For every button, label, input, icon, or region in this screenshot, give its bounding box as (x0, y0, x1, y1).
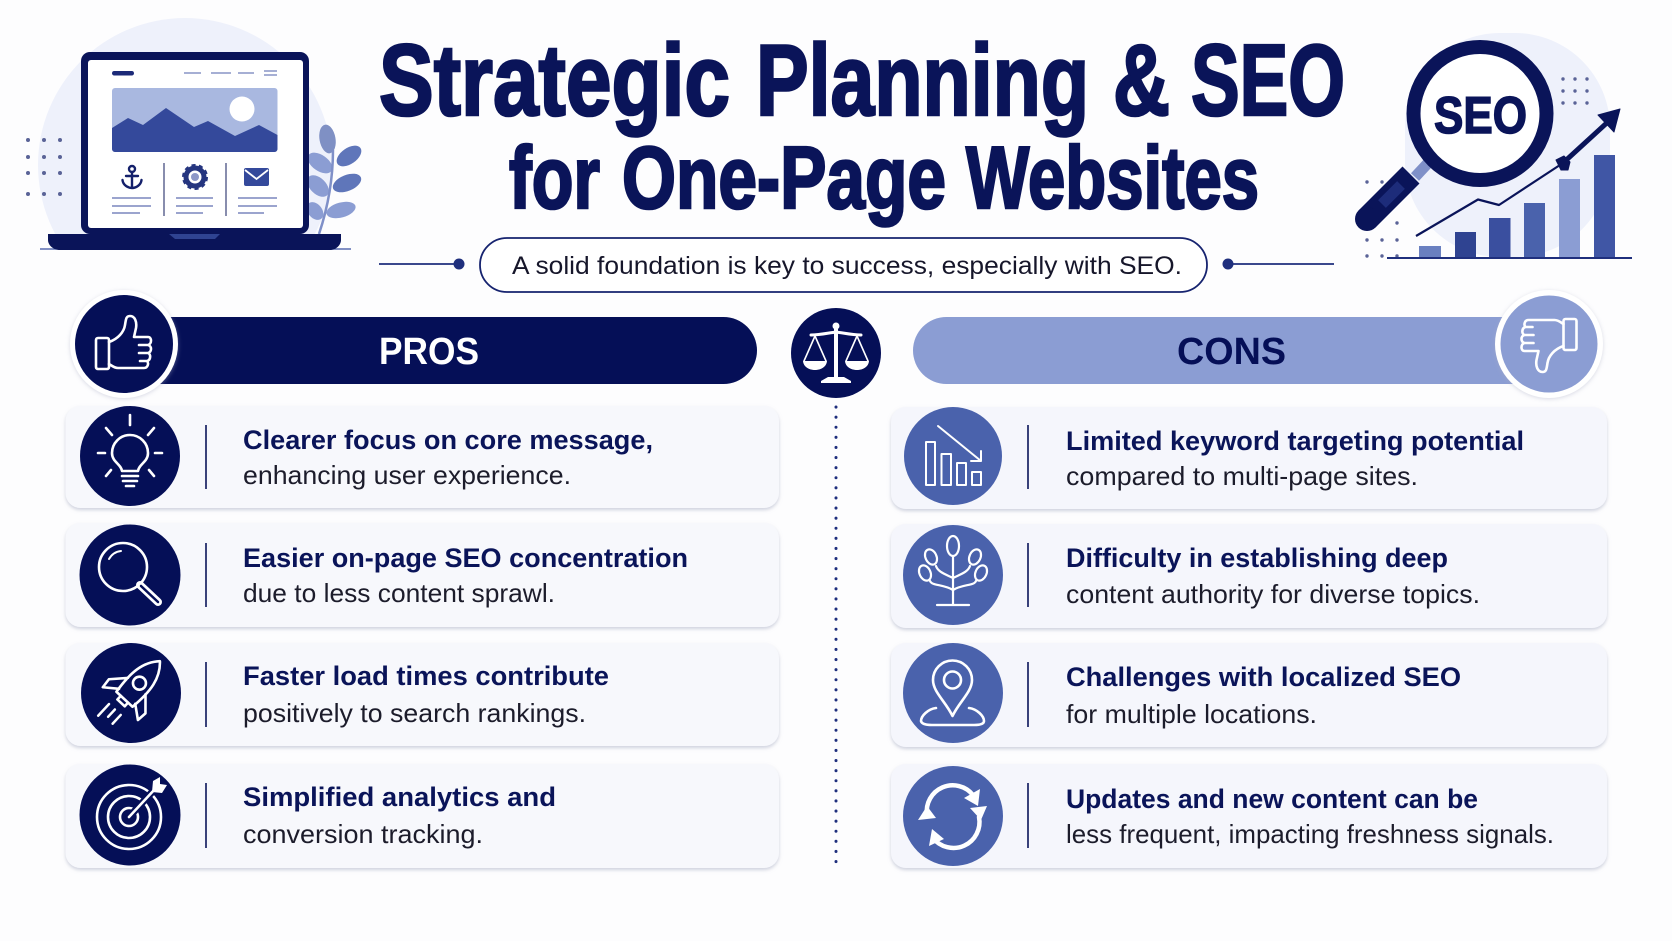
bar chart (1387, 155, 1632, 258)
dot grid (26, 138, 62, 196)
con card 3 (891, 643, 1607, 747)
icon: branching tree (903, 525, 1003, 625)
con card 1: compared to multi-page sites. (1066, 461, 1418, 491)
subtitle pill: A solid foundation is key to success, especially with SEO. (512, 252, 1182, 280)
pro card 2: due to less content sprawl. (243, 578, 555, 608)
pro card 2 (66, 523, 779, 627)
pro card 2: Easier on-page SEO concentration (243, 543, 688, 573)
hero image (112, 88, 278, 152)
title: Websites (966, 128, 1259, 227)
con card 4: less frequent, impacting freshness signals. (1066, 819, 1554, 849)
pro card 1 (66, 406, 779, 508)
con card 1: Limited keyword targeting potential (1066, 426, 1524, 456)
cons label: CONS (1177, 331, 1286, 373)
laptop base (40, 248, 351, 250)
con card 2: content authority for diverse topics. (1066, 579, 1480, 609)
gear icon (184, 166, 206, 188)
pros label: PROS (379, 331, 479, 373)
SEO growth illustration (1355, 33, 1632, 258)
subtitle pill (379, 238, 1334, 292)
magnifying glass: SEO (1434, 87, 1527, 145)
con card 3: Challenges with localized SEO (1066, 662, 1461, 692)
icon: declining bars (904, 407, 1002, 505)
title (379, 25, 1345, 227)
envelope icon (244, 168, 269, 186)
pro card 4: conversion tracking. (243, 819, 483, 849)
pro card 4: Simplified analytics and (243, 782, 556, 812)
panel: pros header (70, 290, 757, 398)
pro card 3 (66, 643, 779, 746)
pro card 3: positively to search rankings. (243, 698, 586, 728)
pro card 1: enhancing user experience. (243, 460, 571, 490)
title: for (509, 128, 600, 227)
con card 4: Updates and new content can be (1066, 784, 1478, 814)
icon: thumbs down (1495, 290, 1603, 398)
icon: refresh arrows (903, 766, 1003, 866)
panel: cons list (891, 407, 1607, 868)
dotted divider (834, 407, 838, 868)
plant (303, 123, 365, 234)
icon: rocket (81, 643, 181, 743)
con card 3: for multiple locations. (1066, 699, 1317, 729)
trend arrow (1416, 109, 1620, 236)
panel: pros list (66, 406, 779, 868)
icon: balance scale (791, 308, 881, 398)
con card 2: Difficulty in establishing deep (1066, 543, 1448, 573)
pro card 4 (66, 764, 779, 868)
icon: light bulb (80, 406, 180, 506)
title: SEO (1191, 25, 1345, 137)
con card 2 (891, 524, 1607, 628)
title: Strategic (379, 25, 730, 137)
pro card 1: Clearer focus on core message, (243, 425, 653, 455)
anchor icon (122, 166, 142, 188)
dots (1365, 77, 1589, 258)
icon: target (80, 764, 180, 866)
magnifying glass (1355, 47, 1546, 231)
pro card 3: Faster load times contribute (243, 661, 609, 691)
laptop illustration (26, 18, 362, 250)
icon: magnifying glass (80, 524, 180, 626)
icon: map pin (903, 643, 1003, 743)
title: & (1113, 25, 1170, 137)
title: One-Page (622, 128, 946, 227)
laptop screen (81, 52, 309, 234)
con card 4 (891, 764, 1607, 868)
panel: cons header (913, 290, 1603, 398)
con card 1 (891, 407, 1607, 509)
title: Planning (756, 25, 1089, 137)
icon: thumbs up (70, 290, 178, 398)
